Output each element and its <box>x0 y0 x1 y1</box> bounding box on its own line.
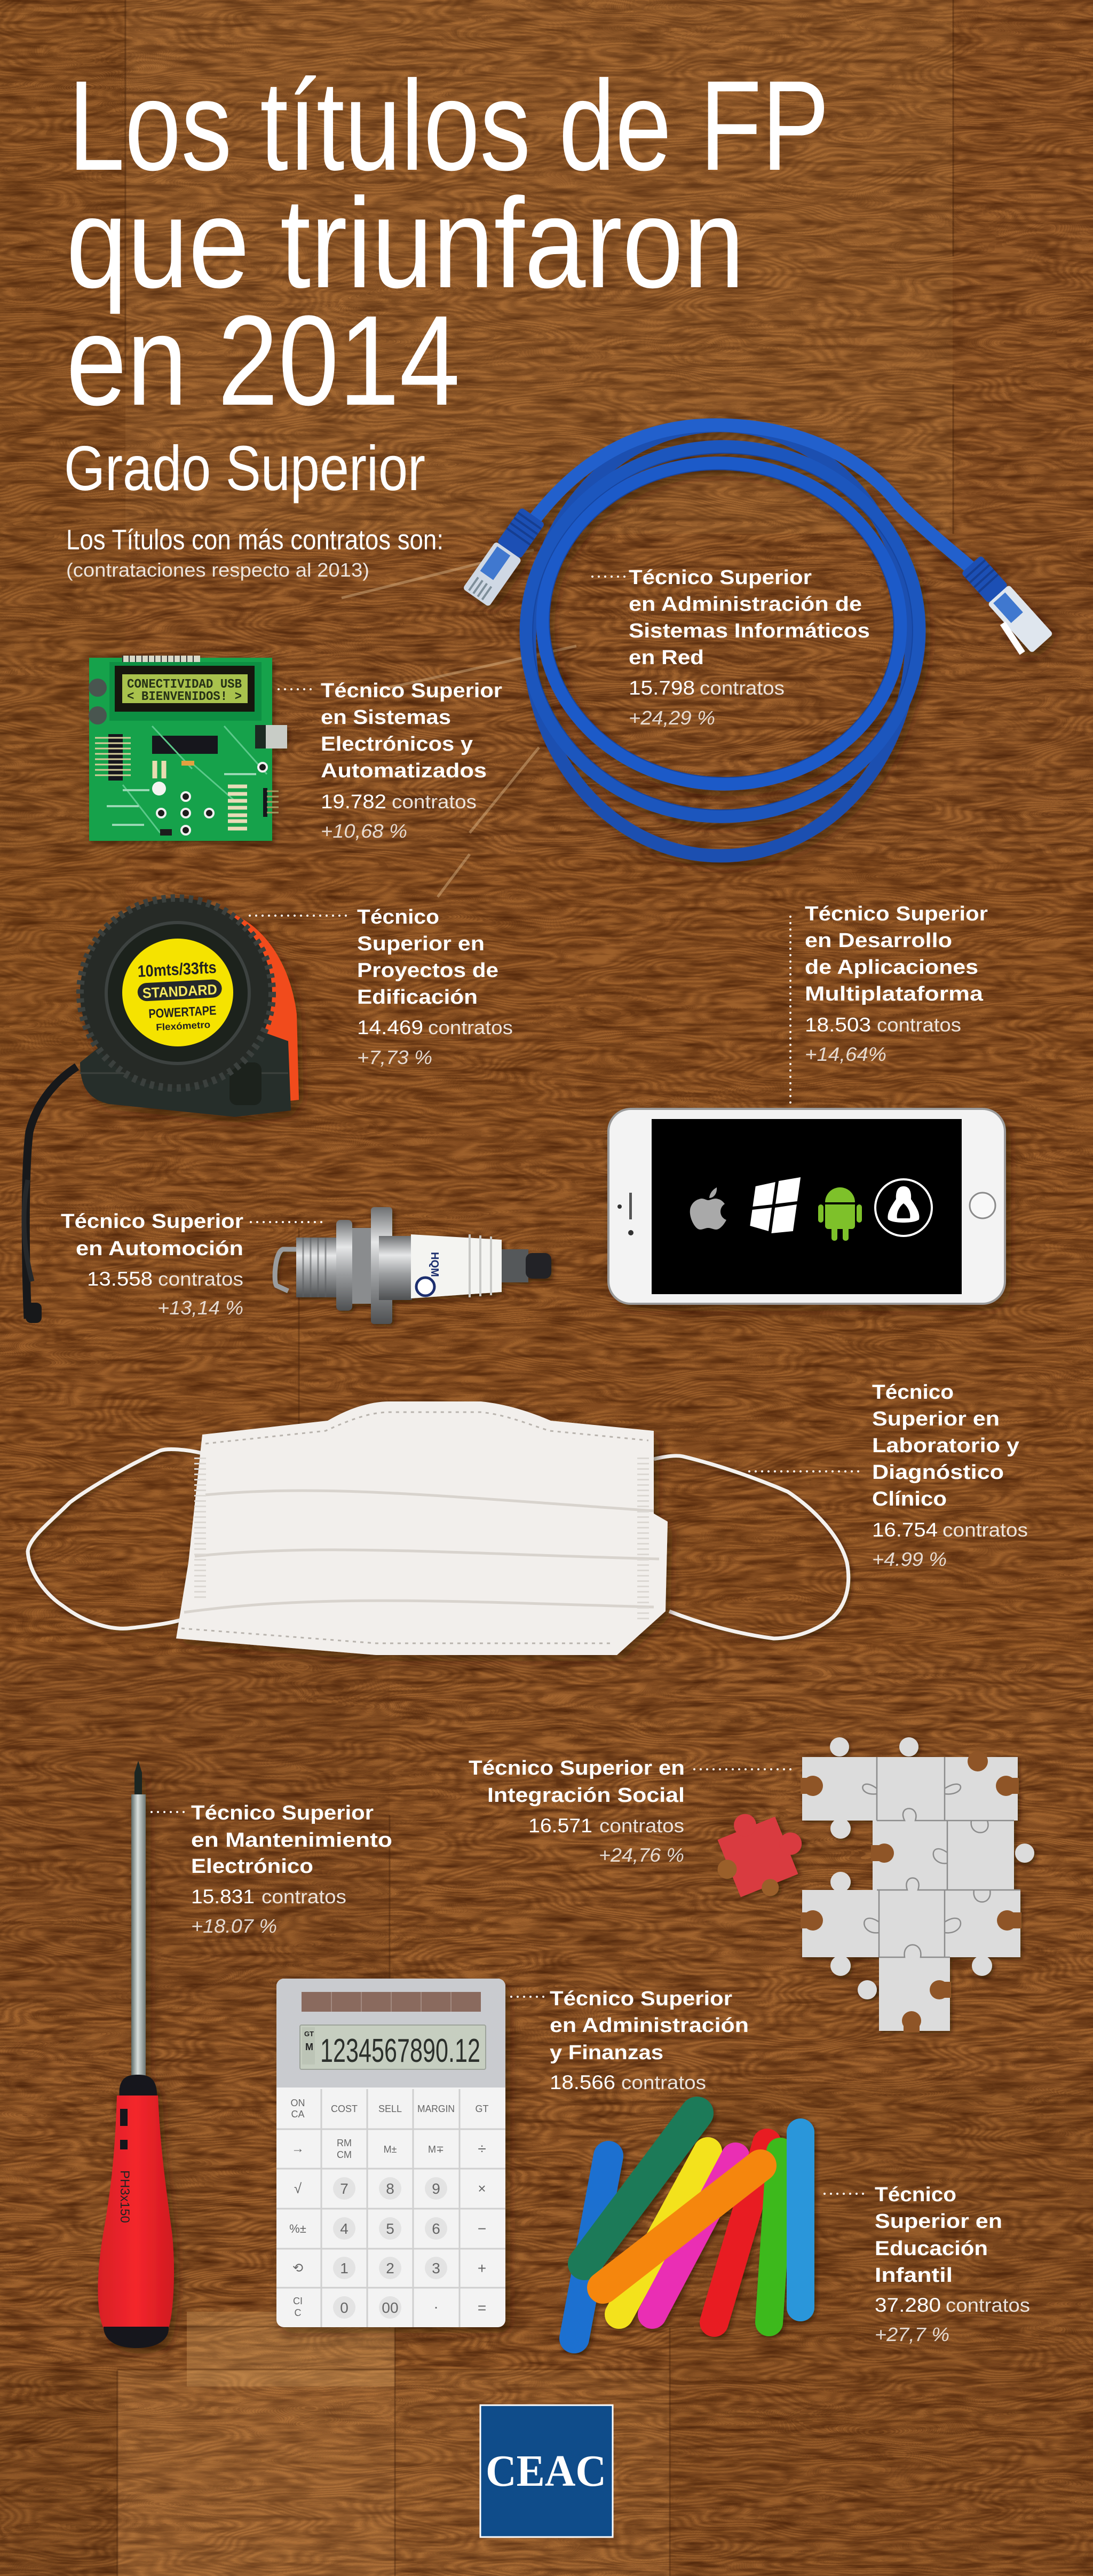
text block: Mantenimiento Electrónico: +18.07 % <box>191 1915 277 1937</box>
icon: white calculator: COST <box>331 2104 358 2114</box>
text block: Desarrollo de Aplicaciones <box>790 903 988 1105</box>
icon: white calculator: RM <box>337 2138 352 2148</box>
text block: Administración y Finanzas <box>511 1988 749 2093</box>
icon: windows logo <box>749 1177 801 1233</box>
subtitle: Grado Superior: Grado Superior <box>64 433 425 504</box>
icon: white calculator: ON <box>290 2098 305 2108</box>
icon: spark plug: HQM <box>429 1252 440 1277</box>
text block: Educación Infantil: 37.280 <box>875 2294 941 2316</box>
text block: Sistemas Electrónicos: Automatizados <box>321 760 487 782</box>
icon: screwdriver <box>98 1761 174 2348</box>
text block: Sistemas Electrónicos: contratos <box>392 791 477 813</box>
text block: Sistemas Informáticos: Técnico Superior <box>629 566 812 589</box>
text block: Administración y Finanzas: Técnico Superior <box>550 1988 732 2010</box>
text block: Automoción: en Automoción <box>76 1238 243 1260</box>
icon: linux penguin logo <box>875 1179 932 1236</box>
text block: Integración Social: 16.571 <box>528 1815 592 1837</box>
icon: white calculator: 6 <box>432 2220 440 2237</box>
icon: surgical mask <box>28 1401 849 1655</box>
text block: Automoción: contratos <box>158 1268 243 1290</box>
text block: Sistemas Electrónicos: Técnico Superior <box>321 680 502 702</box>
icon: white calculator: CA <box>291 2109 305 2120</box>
icon: white calculator: 1 <box>340 2260 349 2276</box>
icon: green circuit board <box>89 656 287 841</box>
icon: white calculator: CM <box>337 2149 352 2160</box>
icon: red puzzle piece <box>701 1798 817 1911</box>
text block: Desarrollo de Aplicaciones: en Desarrollo <box>805 929 952 952</box>
icon: white calculator: SELL <box>378 2104 402 2114</box>
text block: Sistemas Informáticos: contratos <box>700 677 785 699</box>
icon: android logo <box>818 1187 862 1241</box>
text block: Educación Infantil: +27,7 % <box>875 2323 949 2345</box>
text block: Educación Infantil: Educación <box>875 2238 988 2260</box>
text block: Educación Infantil: contratos <box>946 2294 1030 2316</box>
text block: Sistemas Informáticos: en Administración de <box>629 593 862 616</box>
icon: white calculator: %± <box>289 2222 306 2235</box>
icon: white calculator: → <box>291 2141 304 2156</box>
icon: screwdriver: PH3x150 <box>117 2170 132 2223</box>
intro text: (contrataciones respecto al 2013) <box>66 559 369 581</box>
icon: white calculator: 2 <box>386 2260 394 2276</box>
text block: Proyectos de Edificación: Superior en <box>357 933 485 955</box>
text block: Automoción: +13,14 % <box>157 1297 243 1319</box>
icon: white calculator: 5 <box>386 2220 394 2237</box>
text block: Educación Infantil: Técnico <box>875 2184 956 2206</box>
text block: Laboratorio y Diagnóstico: Diagnóstico <box>872 1461 1004 1484</box>
text block: Proyectos de Edificación: Técnico <box>357 906 439 928</box>
icon: tape measure: STANDARD <box>142 981 218 1002</box>
icon: white calculator: M∓ <box>428 2144 444 2155</box>
text block: Integración Social: Técnico Superior en <box>469 1757 685 1779</box>
intro text <box>66 524 443 581</box>
icon: white calculator: − <box>478 2220 486 2237</box>
icon: white calculator: √ <box>294 2180 302 2196</box>
text block: Proyectos de Edificación: Edificación <box>357 986 478 1009</box>
text block: Mantenimiento Electrónico: Electrónico <box>191 1855 313 1878</box>
icon: white calculator: M <box>305 2042 313 2052</box>
text block: Sistemas Informáticos: 15.798 <box>629 677 695 699</box>
text block: Educación Infantil: Infantil <box>875 2264 953 2287</box>
text block: Desarrollo de Aplicaciones: de Aplicaciones <box>805 956 978 979</box>
title: en 2014 <box>66 289 460 432</box>
text block: Laboratorio y Diagnóstico <box>749 1381 1028 1570</box>
icon: white calculator: 8 <box>386 2180 394 2197</box>
title <box>66 54 829 432</box>
text block: Mantenimiento Electrónico: 15.831 <box>191 1886 255 1908</box>
text block: Administración y Finanzas: 18.566 <box>550 2071 615 2093</box>
icon: apple logo <box>690 1187 726 1230</box>
title: que triunfaron <box>66 171 744 314</box>
text block: Desarrollo de Aplicaciones: 18.503 <box>805 1014 871 1036</box>
icon: white calculator: 3 <box>432 2260 440 2276</box>
text block: Integración Social: Integración Social <box>487 1784 685 1807</box>
icon: white calculator: ÷ <box>478 2140 486 2157</box>
icon: smartphone <box>608 1109 1005 1304</box>
text block: Mantenimiento Electrónico: en Mantenimiento <box>191 1829 392 1852</box>
icon: green circuit board: CONECTIVIDAD USB <box>127 678 242 692</box>
text block: Proyectos de Edificación: 14.469 <box>357 1017 423 1038</box>
text block: Laboratorio y Diagnóstico: Técnico <box>872 1381 954 1404</box>
icon: white calculator: 9 <box>432 2180 440 2197</box>
text block: Laboratorio y Diagnóstico: 16.754 <box>872 1519 938 1541</box>
icon: white calculator: C <box>295 2307 301 2318</box>
text block: Automoción <box>61 1210 327 1319</box>
text block: Educación Infantil: Superior en <box>875 2210 1002 2233</box>
text block: Desarrollo de Aplicaciones: +14,64% <box>805 1043 886 1065</box>
text block: Integración Social <box>469 1757 796 1866</box>
logo: CEAC <box>480 2405 613 2537</box>
text block: Desarrollo de Aplicaciones: Multiplataforma <box>805 983 984 1005</box>
icon: spark plug <box>275 1207 551 1324</box>
icon: white calculator: GT <box>475 2104 489 2114</box>
text block: Automoción: 13.558 <box>87 1268 153 1290</box>
icon: tape measure: 10mts/33fts <box>137 958 217 981</box>
icon: white calculator: CI <box>293 2296 303 2306</box>
text block: Sistemas Electrónicos: 19.782 <box>321 791 386 813</box>
icon: white calculator: = <box>478 2299 486 2316</box>
text block: Proyectos de Edificación: contratos <box>428 1017 513 1038</box>
text block: Administración y Finanzas: contratos <box>621 2071 706 2093</box>
icon: white calculator: GT <box>304 2030 314 2038</box>
icon: left RJ45 connector <box>463 506 546 607</box>
text block: Mantenimiento Electrónico <box>152 1802 392 1937</box>
text block: Proyectos de Edificación <box>250 906 513 1068</box>
text block: Laboratorio y Diagnóstico: contratos <box>942 1519 1028 1541</box>
text block: Proyectos de Edificación: +7,73 % <box>357 1046 432 1068</box>
icon: tape measure <box>24 898 299 1323</box>
logo: CEAC: CEAC <box>486 2446 606 2496</box>
text block: Laboratorio y Diagnóstico: +4.99 % <box>872 1548 947 1570</box>
text block: Desarrollo de Aplicaciones: Técnico Superior <box>805 903 988 925</box>
icon: coloured chalk sticks <box>574 2113 801 2338</box>
text block: Laboratorio y Diagnóstico: Superior en <box>872 1408 1000 1430</box>
title: Los títulos de FP <box>68 54 829 197</box>
text block: Administración y Finanzas: en Administración <box>550 2014 749 2037</box>
text block: Educación Infantil <box>825 2184 1030 2345</box>
icon: white calculator: 0 <box>340 2299 349 2316</box>
text block: Laboratorio y Diagnóstico: Clínico <box>872 1488 947 1510</box>
icon: white calculator: ⟲ <box>292 2261 303 2275</box>
icon: blue network cable <box>463 425 1053 856</box>
text block: Desarrollo de Aplicaciones: contratos <box>877 1014 961 1036</box>
text block: Mantenimiento Electrónico: Técnico Superior <box>191 1802 374 1824</box>
text block: Sistemas Informáticos <box>592 566 870 729</box>
text block: Sistemas Informáticos: +24,29 % <box>629 707 715 729</box>
text block: Sistemas Informáticos: Sistemas Informáticos <box>629 620 870 642</box>
icon: white calculator: 7 <box>340 2180 349 2197</box>
text block: Sistemas Electrónicos: en Sistemas <box>321 706 451 729</box>
icon: white calculator <box>276 1979 505 2327</box>
text block: Mantenimiento Electrónico: contratos <box>262 1886 346 1908</box>
icon: white jigsaw puzzle <box>801 1737 1034 2033</box>
text block: Automoción: Técnico Superior <box>61 1210 243 1233</box>
text block: Integración Social: +24,76 % <box>599 1844 684 1866</box>
icon: tape measure: Flexómetro <box>156 1019 211 1033</box>
icon: white calculator: · <box>433 2298 439 2315</box>
icon: white calculator: × <box>478 2180 486 2196</box>
text block: Sistemas Electrónicos: +10,68 % <box>321 820 407 842</box>
text block: Integración Social: contratos <box>599 1815 684 1837</box>
icon: white calculator: MARGIN <box>417 2104 455 2114</box>
icon: white calculator: + <box>478 2260 486 2276</box>
intro text: Los Títulos con más contratos son: <box>66 524 443 556</box>
icon: tape measure: POWERTAPE <box>148 1003 217 1021</box>
icon: white calculator: 1234567890.12 <box>320 2033 480 2069</box>
text block: Administración y Finanzas: y Finanzas <box>550 2042 663 2064</box>
icon: white calculator: 4 <box>340 2220 349 2237</box>
text block: Sistemas Electrónicos <box>279 680 502 842</box>
text block: Sistemas Electrónicos: Electrónicos y <box>321 733 473 755</box>
icon: right RJ45 connector <box>955 555 1053 658</box>
text block: Laboratorio y Diagnóstico: Laboratorio y <box>872 1435 1019 1457</box>
icon: green circuit board: < BIENVENIDOS! > <box>127 690 242 704</box>
icon: white calculator: M± <box>384 2144 397 2155</box>
icon: white calculator: 00 <box>382 2299 399 2316</box>
text block: Proyectos de Edificación: Proyectos de <box>357 959 498 982</box>
text block: Sistemas Informáticos: en Red <box>629 647 704 669</box>
